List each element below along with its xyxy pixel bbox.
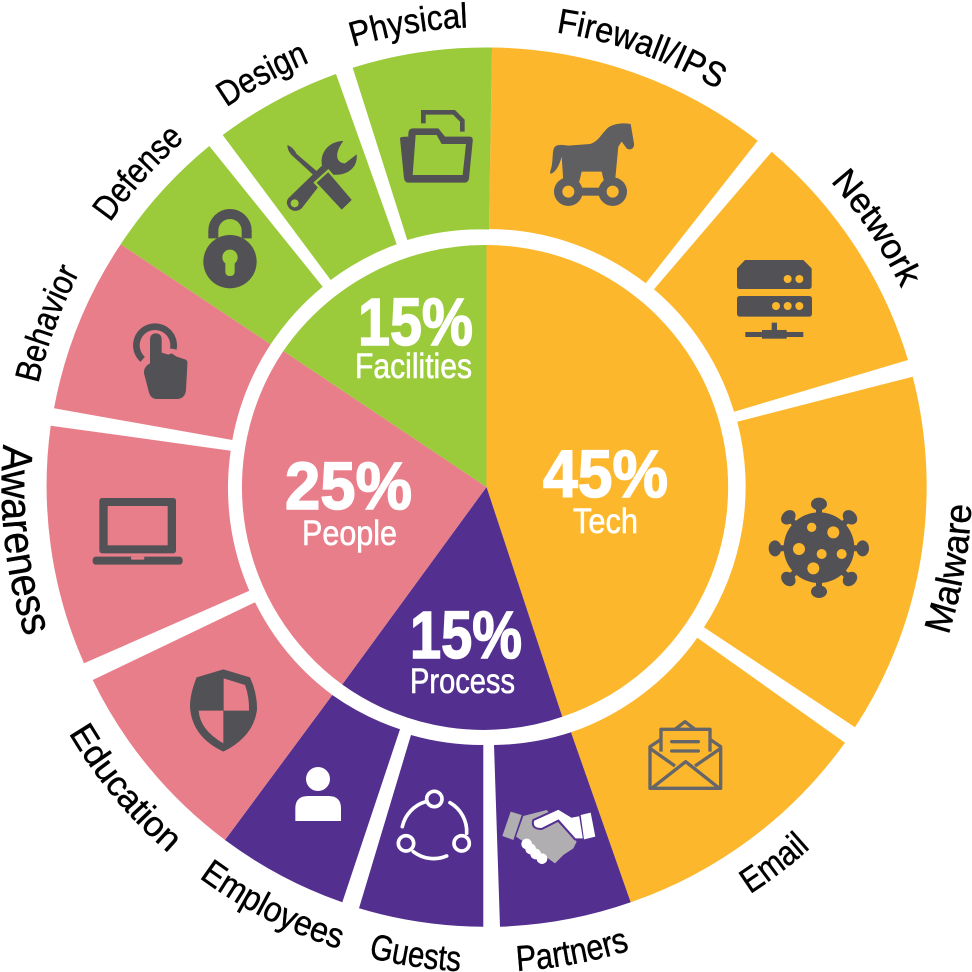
Tech percentage: 45% [543,437,668,512]
icon: shared circle [398,791,469,859]
icon: shield [190,669,257,752]
icon: laptop [93,498,183,565]
icon: padlock [203,214,257,288]
label: Email: Email [738,830,810,894]
icon: open envelope [650,722,721,788]
label: Network: Network [832,168,919,289]
wedge: Tech [486,245,728,717]
segment: Guests [359,735,483,927]
segment: Awareness [47,426,249,663]
icon: crossed tools [287,141,357,211]
label: Behavior: Behavior [15,264,78,382]
segment: Email [571,638,845,902]
segment: Network [654,152,908,412]
pie labels [285,285,668,701]
pie chart: budget shares [242,245,728,730]
icon: trojan horse [550,123,634,202]
segment: Employees [225,695,400,902]
segment: Education [93,602,332,840]
label: Defense: Defense [92,129,182,221]
label: Education: Education [70,722,178,852]
wedge: Facilities [283,245,486,487]
segment: Behavior [54,244,271,440]
segment: Firewall/IPS [489,48,758,283]
wedge: Process [342,487,562,730]
label: Employees: Employees [200,859,343,948]
People name: People [302,514,397,553]
Process percentage: 15% [410,598,522,673]
icon: pointing hand [136,327,187,399]
Facilities name: Facilities [355,347,472,386]
label: Design: Design [215,47,308,106]
segment: Physical [353,47,492,240]
icon: open folder [400,112,473,183]
Process name: Process [410,662,515,701]
segment: Partners [494,732,631,927]
icon: network server [737,260,812,339]
segment: Design [223,74,397,280]
icon: handshake [502,809,595,864]
segment: Defense [121,146,323,344]
wedge: People [242,351,486,684]
label: Firewall/IPS: Firewall/IPS [558,8,726,86]
icon: virus [769,498,869,598]
Facilities percentage: 15% [358,285,473,360]
People percentage: 25% [285,449,412,524]
segment: Malware [704,377,927,727]
Tech name: Tech [573,502,638,541]
icon: person [295,767,341,821]
